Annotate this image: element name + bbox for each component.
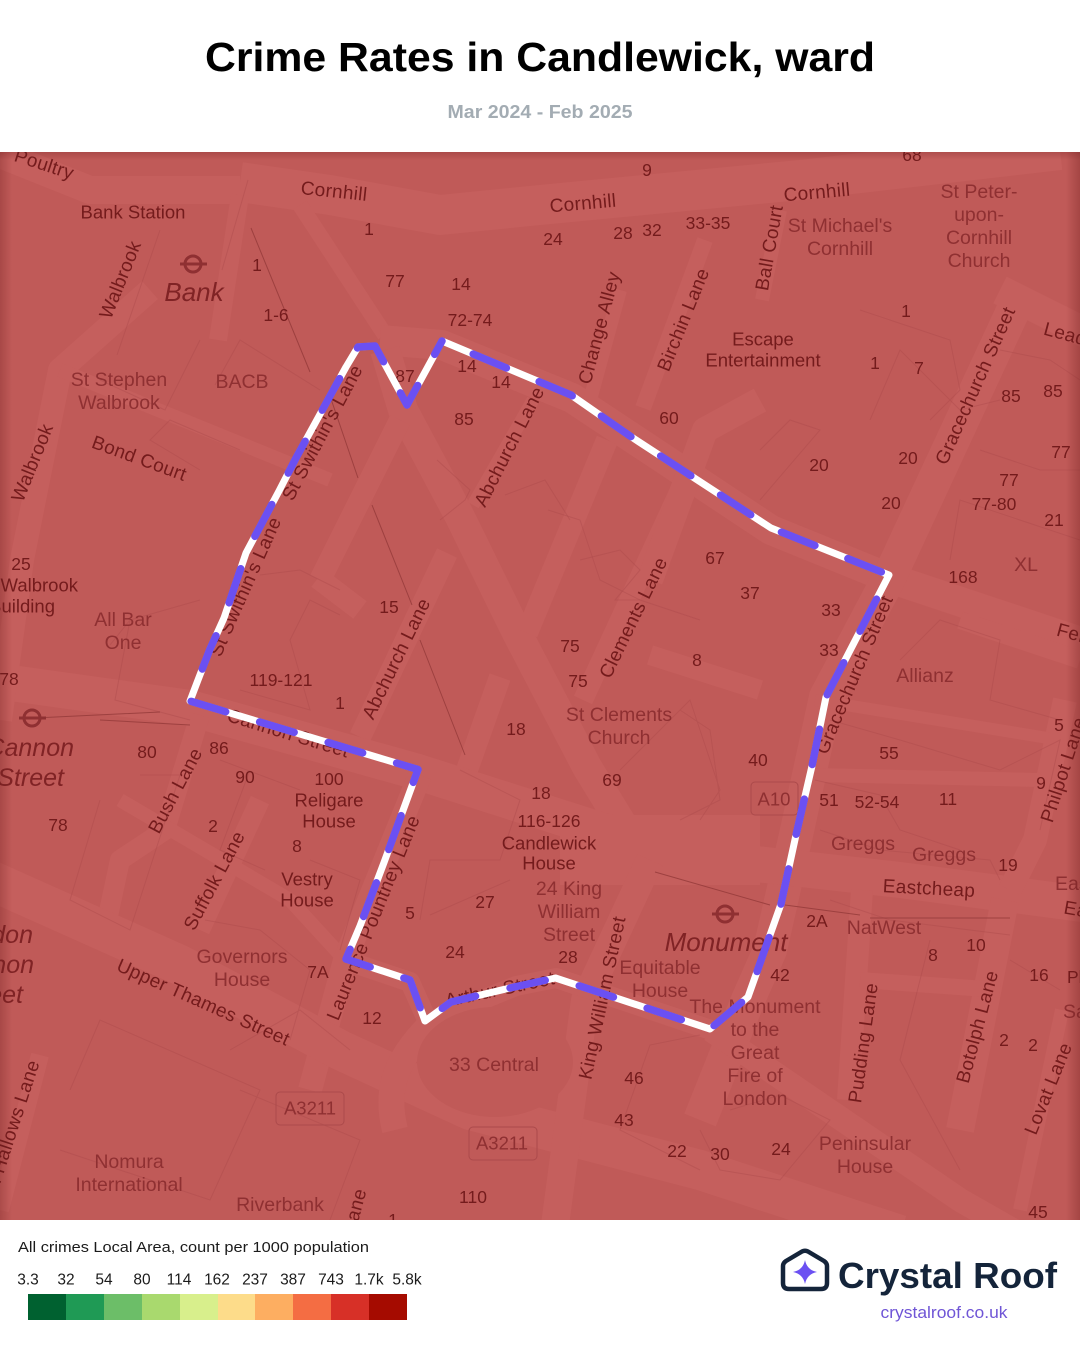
map labels: 24 [543,229,563,249]
map labels: 7A [307,962,329,982]
map labels: St Stephen [71,369,167,391]
map labels: Cornhill [946,227,1012,249]
map labels: 2 [208,816,218,836]
road shield: A3211 [276,1092,344,1125]
map labels: 28 [558,947,578,967]
map labels: 80 [137,742,157,762]
map labels: William [538,901,600,923]
map labels: 30 [710,1144,730,1164]
map labels: Governors [196,946,288,968]
map labels: 78 [48,815,68,835]
map labels: 32 [642,220,662,240]
map labels: BACB [215,371,269,393]
map labels: 9 [1036,773,1046,793]
map labels: Greggs [831,833,895,855]
map labels: 52-54 [855,792,900,812]
map labels: 90 [235,767,255,787]
thin rail lines [35,228,1010,918]
legend scale labels: 54 [95,1272,113,1288]
map labels: House [214,969,270,991]
legend scale labels: 3.3 [17,1272,39,1288]
map labels: 20 [898,448,918,468]
map labels: Eastcheap [882,876,976,902]
map labels: House [522,852,576,874]
map labels: Walbrook [1,574,79,596]
map labels: 42 [770,965,790,985]
map labels: 24 [771,1139,791,1159]
map labels: 67 [705,548,725,568]
map building outlines [60,180,1080,1220]
legend scale labels: 237 [242,1272,268,1288]
map labels: Candlewick [502,832,597,854]
map labels: St Clements [566,704,672,726]
map labels: 12 [362,1008,382,1028]
map labels: 20 [809,455,829,475]
map labels: 21 [1044,510,1064,530]
map labels: 119-121 [250,670,312,690]
map labels: 40 [748,750,768,770]
map labels: Pudding Lane [845,982,883,1104]
map labels: Poultry [12,146,77,185]
map labels: 28 [613,223,633,243]
map labels: 8 [692,650,702,670]
map labels: 110 [459,1187,487,1207]
map labels: Great [731,1042,780,1064]
map labels: to the [731,1019,779,1041]
map labels: House [837,1156,893,1178]
map labels: 77 [999,470,1019,490]
map labels: House [632,980,688,1002]
map labels: 22 [667,1141,687,1161]
map labels: Religare [295,790,363,810]
map labels: Bond Court [89,432,190,486]
map labels: Abchurch Lane [471,384,549,510]
map labels: 43 [614,1110,634,1130]
map labels: 33 [819,640,839,660]
map labels: 2A [806,911,828,931]
map labels: Gracechurch Street [812,592,898,757]
map labels: 33 Central [449,1054,539,1076]
map labels: 2 [1028,1035,1038,1055]
map labels: 85 [1001,386,1021,406]
roundabout block: 33 Central [417,1007,573,1117]
legend scale labels [17,1272,422,1288]
map labels: St Peter- [941,181,1017,203]
map labels: 75 [560,636,580,656]
map labels: Peninsular [819,1133,912,1155]
map labels: 116-126 [518,811,580,831]
map labels: 11 [939,789,957,809]
icon: Monument tube roundel [712,906,739,922]
map labels: 77-80 [972,494,1017,514]
map labels: Walbrook [78,392,160,414]
map labels: Laurence Pountney Lane [323,813,425,1023]
map labels: Lovat Lane [1021,1040,1077,1138]
map labels: Allianz [896,665,954,687]
legend scale labels: 162 [204,1272,230,1288]
map labels: 1 [364,219,374,239]
map labels: 33-35 [686,213,730,233]
map labels: Cornhill [549,191,617,217]
road shield: A3211: A3211 [476,1132,528,1154]
map labels: 19 [998,855,1018,875]
map labels: King William Street [575,914,631,1081]
map labels: Vestry [281,868,333,890]
map labels: Church [948,250,1010,272]
map labels: 14 [457,356,477,376]
map labels: 1-6 [263,305,289,325]
map labels: House [280,890,334,910]
map labels: Bank Station [81,202,185,222]
map labels: upon- [954,204,1004,226]
road shield: A10 [751,782,798,815]
map labels: Cornhill [300,178,368,206]
map labels: 68 [902,145,922,165]
map labels: 87 [395,366,415,386]
map labels: Greggs [912,844,976,866]
map labels: 69 [602,770,622,790]
map labels: International [75,1174,183,1196]
map labels: Monument [665,927,789,957]
road shield: A3211 [469,1127,537,1160]
map edge shading [0,152,1080,1220]
map labels: One [105,632,141,654]
legend scale labels: 114 [167,1272,192,1288]
map labels: 77 [1051,442,1071,462]
subtitle: date range: Mar 2024 - Feb 2025 [448,101,632,122]
map labels: Entertainment [705,350,821,370]
map labels: All Bar [94,609,152,631]
map labels: House [302,810,356,832]
map labels: Cannon Street [224,705,352,763]
map labels: XL [1014,554,1038,576]
map labels: Gracechurch Street [932,304,1020,468]
map labels: 86 [209,738,229,758]
map labels: 10 [966,935,986,955]
map labels: 1 [870,353,880,373]
map labels: 18 [506,719,526,739]
map labels: Clements Lane [596,554,672,682]
map labels: Botolph Lane [953,968,1003,1086]
legend [17,1239,422,1320]
map labels: 1 [901,301,911,321]
map labels: Cornhill [807,238,873,260]
legend colour bar [28,1294,407,1320]
map labels: Birchin Lane [654,265,714,375]
map labels: 37 [740,583,760,603]
road shield: A3211: A3211 [284,1098,336,1118]
map labels: 1 [388,1210,398,1230]
map labels: 7 [914,358,924,378]
map labels: 77 [385,271,405,291]
icon: Cannon Street tube roundel [19,710,46,726]
map labels: 27 [475,892,495,912]
map labels: 33 [821,600,841,620]
map labels: Escape [732,328,794,350]
road shield: A10: A10 [758,788,790,810]
legend scale labels: 80 [133,1272,151,1288]
map labels: 8 [292,836,302,856]
map labels: Change Alley [575,269,625,387]
map labels: 46 [624,1068,644,1088]
map labels: NatWest [847,917,922,939]
map labels: St Swithin's Lane [278,362,368,504]
icon: house with star [783,1251,827,1289]
map labels: 18 [531,783,551,803]
map labels: 75 [568,671,588,691]
map labels: 100 [314,769,344,789]
map labels: 24 [445,942,465,962]
map labels: ane [343,1187,371,1223]
wordmark: Crystal Roof [838,1255,1058,1296]
legend title: All crimes Local Area, count per 1000 population [18,1239,369,1256]
map labels: 24 King [536,878,602,900]
map labels: 85 [454,409,474,429]
map labels: 168 [948,567,978,587]
map labels: Fire of [727,1065,783,1087]
map labels: Suffolk Lane [180,828,250,934]
map labels: Riverbank [236,1194,324,1216]
legend scale labels: 5.8k [392,1272,422,1288]
map labels: 1 [335,693,345,713]
map labels: Arthur Street [443,968,557,1012]
map labels: 25 [11,554,31,574]
map labels: 9 [642,160,652,180]
map labels: 5 [405,903,415,923]
map labels: 5 [1054,715,1064,735]
legend scale labels: 743 [318,1272,344,1288]
ward boundary [190,341,889,1029]
map labels: Street [543,924,596,946]
map labels: 14 [451,274,471,294]
legend scale labels: 32 [57,1272,75,1288]
map labels: 55 [879,743,899,763]
map labels: Church [588,727,650,749]
legend scale labels: 387 [280,1272,306,1288]
map labels: 51 [819,790,839,810]
map labels: Bank [164,277,226,307]
map labels: Upper Thames Street [113,955,293,1051]
logo: Crystal Roof [783,1251,1058,1322]
map labels: Equitable [619,957,701,979]
title: Crime Rates in Candlewick, ward [205,34,875,80]
icon: Bank tube roundel [180,256,207,272]
map labels: 45 [1028,1202,1048,1222]
map labels: The Monument [689,996,821,1018]
map labels: 16 [1029,965,1049,985]
map labels: 15 [379,597,399,617]
map labels: Bush Lane [145,745,207,837]
map labels: Nomura [94,1151,164,1173]
map labels: Walbrook [96,238,146,322]
map labels: St Michael's [788,215,892,237]
map labels: Ball Court [752,203,788,292]
map labels: St Swithin's Lane [206,514,286,660]
map labels: 20 [881,493,901,513]
website url: crystalroof.co.uk [880,1304,1008,1322]
legend scale labels: 1.7k [354,1272,384,1288]
map labels: 14 [491,372,511,392]
map labels: Abchurch Lane [359,595,435,723]
map labels: London [722,1088,788,1110]
map labels: 60 [659,408,679,428]
map labels: Cornhill [783,180,851,206]
map labels: 85 [1043,381,1063,401]
map labels: 1 [252,255,262,275]
map labels: 2 [999,1030,1009,1050]
map labels: 72-74 [448,310,493,330]
map labels: 8 [928,945,938,965]
map labels: Walbrook [8,421,58,505]
